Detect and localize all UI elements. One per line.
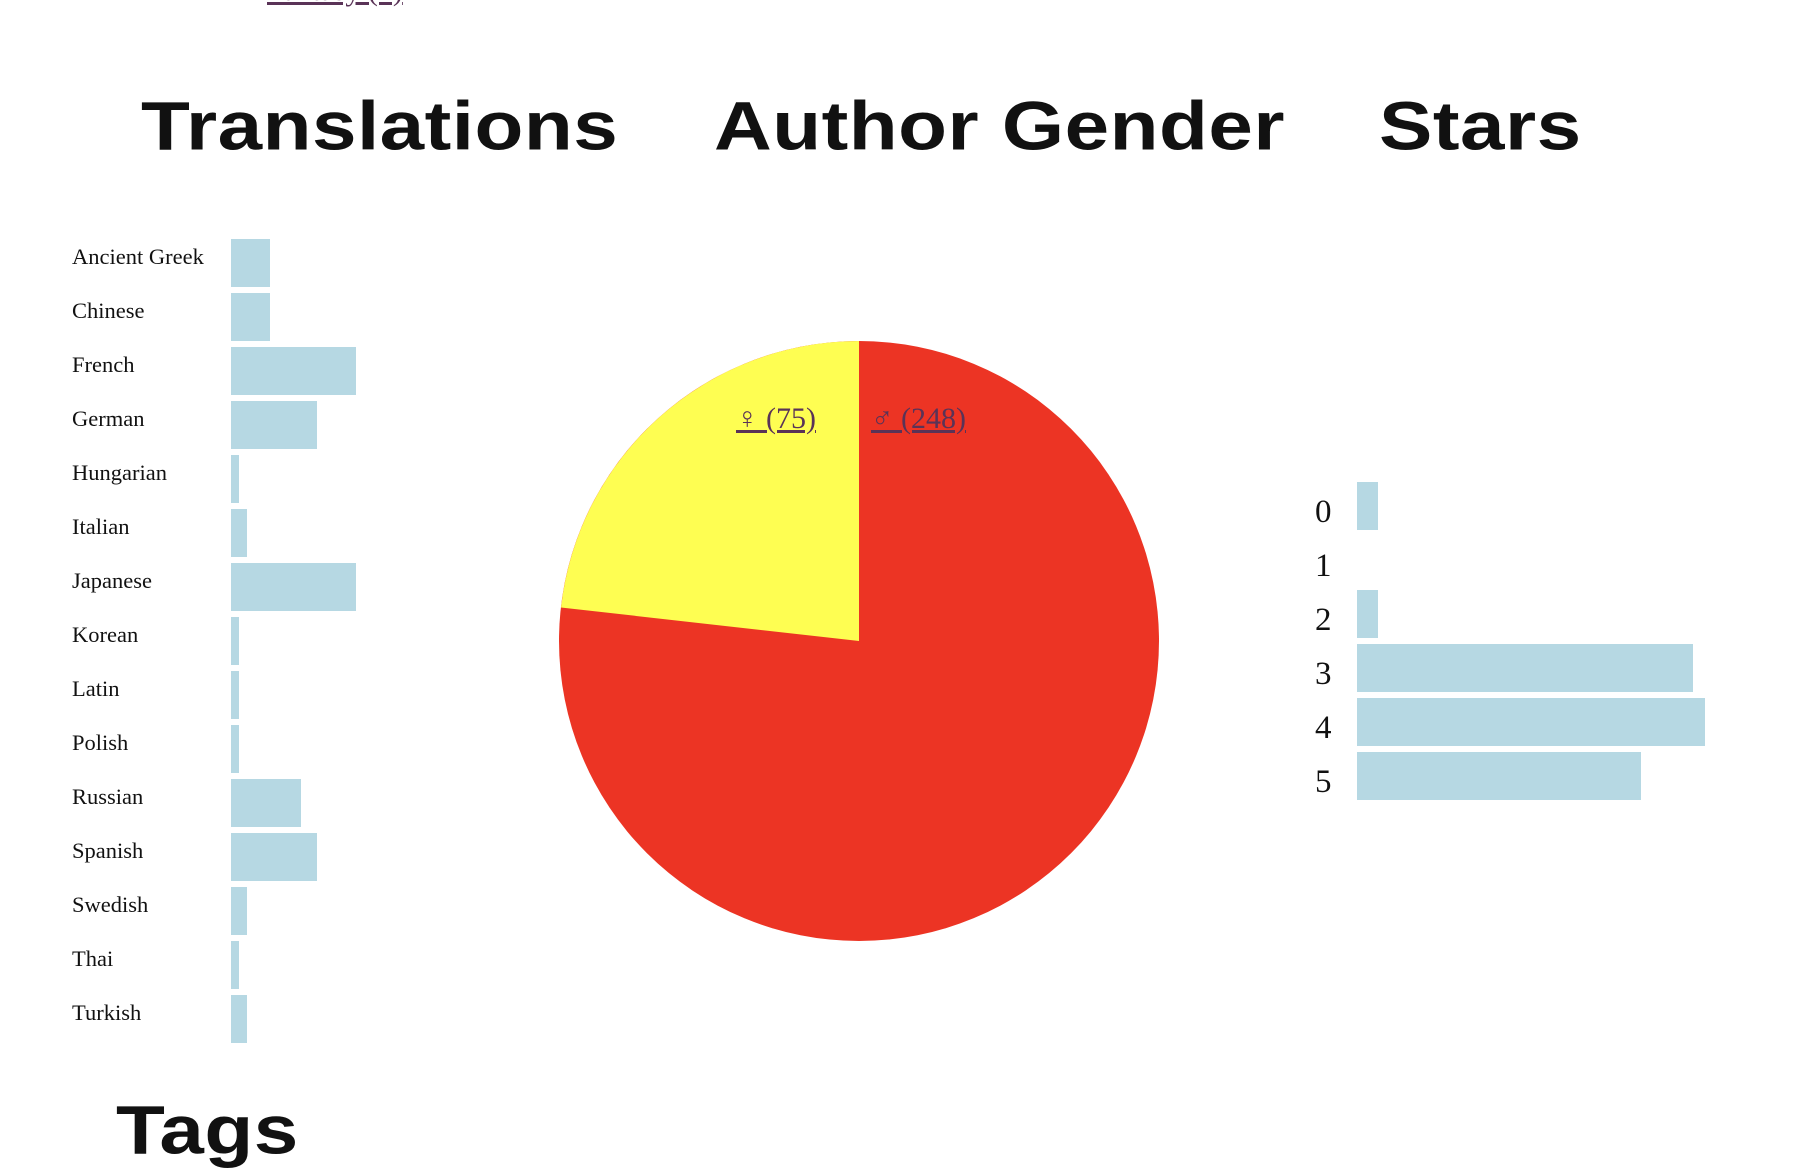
chart: stars bars: 3 [1315,656,1332,692]
chart: translations bars: Japanese [72,568,152,593]
chart: translations bars: Korean [72,622,138,647]
chart: translations bars: Polish [72,730,128,755]
title: translations: Translations [141,88,618,164]
chart: stars bars [1315,482,1705,800]
chart: translations bars: Russian [72,784,143,809]
chart: translations bars: Spanish [72,838,143,863]
chart: translations bars: Italian [72,514,129,539]
chart: translations bars: Thai [72,946,113,971]
chart: translations bars [72,239,356,1043]
chart: stars bars: 2 [1315,602,1332,638]
chart: stars bars: 5 [1315,764,1332,800]
chart: stars bars: 4 [1315,710,1332,746]
title: tags: Tags [116,1092,299,1168]
chart: translations bars: German [72,406,144,431]
chart: translations bars: French [72,352,134,377]
chart: translations bars: Turkish [72,1000,141,1025]
chart: translations bars: Swedish [72,892,148,917]
chart: translations bars: Hungarian [72,460,167,485]
pie label: male: ♂ (248) [871,402,966,435]
chart: translations bars: Latin [72,676,119,701]
chart: stars bars: 0 [1315,494,1332,530]
title: stars: Stars [1379,88,1582,164]
pie label: female: ♀ (75) [736,402,816,435]
chart: translations bars: Chinese [72,298,144,323]
chart: stars bars: 1 [1315,548,1332,584]
chart: translations bars: Ancient Greek [72,244,204,269]
title: author gender: Author Gender [714,88,1285,164]
